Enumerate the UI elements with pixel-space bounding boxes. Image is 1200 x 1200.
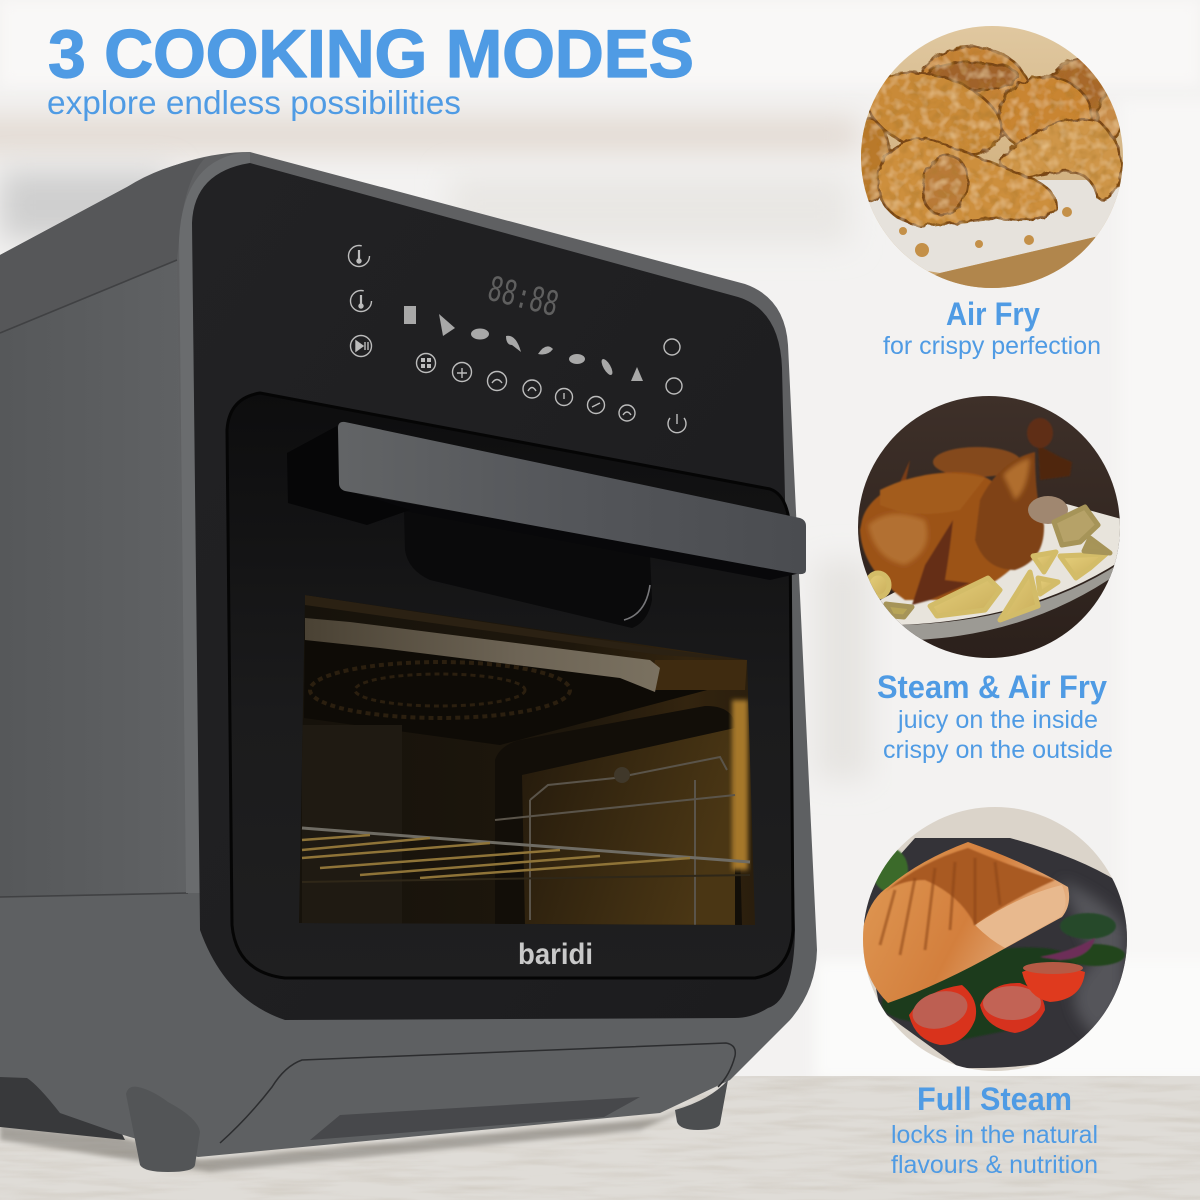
salmon sear stripes <box>880 858 1000 955</box>
garlic <box>1028 496 1068 524</box>
food label: full steam <box>891 1081 1098 1179</box>
food circle: roast chicken <box>855 395 1125 660</box>
air fry heading: Air Fry <box>946 296 1040 332</box>
handle left end <box>287 426 410 525</box>
roasted bird <box>860 418 1072 605</box>
ceiling fan area <box>304 641 707 745</box>
oven side panel <box>0 260 188 897</box>
handle face <box>338 422 806 574</box>
oven underside <box>0 1070 125 1140</box>
door handle <box>287 422 806 580</box>
title: 3 COOKING MODES <box>48 16 694 92</box>
food circle: fried chicken <box>846 25 1125 290</box>
play pause <box>350 336 372 356</box>
subtitle: explore endless possibilities <box>47 84 461 121</box>
temperature up <box>348 246 370 266</box>
steel tray <box>305 618 660 692</box>
full steam line two: flavours & nutrition <box>891 1151 1098 1179</box>
baridi logo: baridi <box>518 938 593 971</box>
digital display: 88:88 <box>484 269 562 325</box>
black front face <box>192 163 795 1020</box>
full steam line one: locks in the natural <box>891 1121 1098 1149</box>
ceiling warm right <box>650 660 747 690</box>
roast potatoes <box>867 507 1110 620</box>
base drawer line <box>220 1043 735 1143</box>
salad greens <box>872 848 1125 1040</box>
base drawer recess <box>310 1097 640 1140</box>
dark plate <box>860 838 1130 1068</box>
oven upper side shoulder <box>0 158 205 333</box>
back wall recess <box>495 706 742 925</box>
salmon fillet <box>862 842 1069 1003</box>
steam and air fry line one: juicy on the inside <box>897 706 1098 734</box>
cherry tomatoes <box>908 962 1085 1045</box>
handle underside shadow <box>360 495 805 580</box>
seam lines <box>0 260 188 897</box>
window glass <box>299 595 755 925</box>
steam and air fry heading: Steam & Air Fry <box>877 669 1107 705</box>
parchment paper <box>860 180 1125 273</box>
marble countertop <box>0 1076 1200 1200</box>
full steam heading: Full Steam <box>917 1081 1072 1117</box>
preset buttons row <box>416 354 635 421</box>
temperature down <box>350 290 372 312</box>
inner rails <box>495 757 735 925</box>
food circle: salmon <box>860 805 1130 1075</box>
front frame ring <box>179 152 250 893</box>
chicken pieces <box>846 47 1122 226</box>
crumbs <box>899 207 1072 257</box>
feet <box>126 1087 200 1172</box>
left wall <box>302 725 402 925</box>
wire rack <box>302 828 750 862</box>
control panel icons <box>348 246 686 433</box>
door handle mount <box>404 510 652 628</box>
air fryer oven <box>0 152 817 1172</box>
food label: air fry <box>883 296 1101 360</box>
food label: steam and air fry <box>877 669 1113 764</box>
plate <box>880 503 1125 625</box>
food icons row <box>404 306 643 381</box>
steam and air fry line two: crispy on the outside <box>883 736 1113 764</box>
right buttons <box>664 339 686 433</box>
oven silhouette <box>0 152 817 1157</box>
door <box>227 393 793 978</box>
air fry description: for crispy perfection <box>883 332 1101 360</box>
